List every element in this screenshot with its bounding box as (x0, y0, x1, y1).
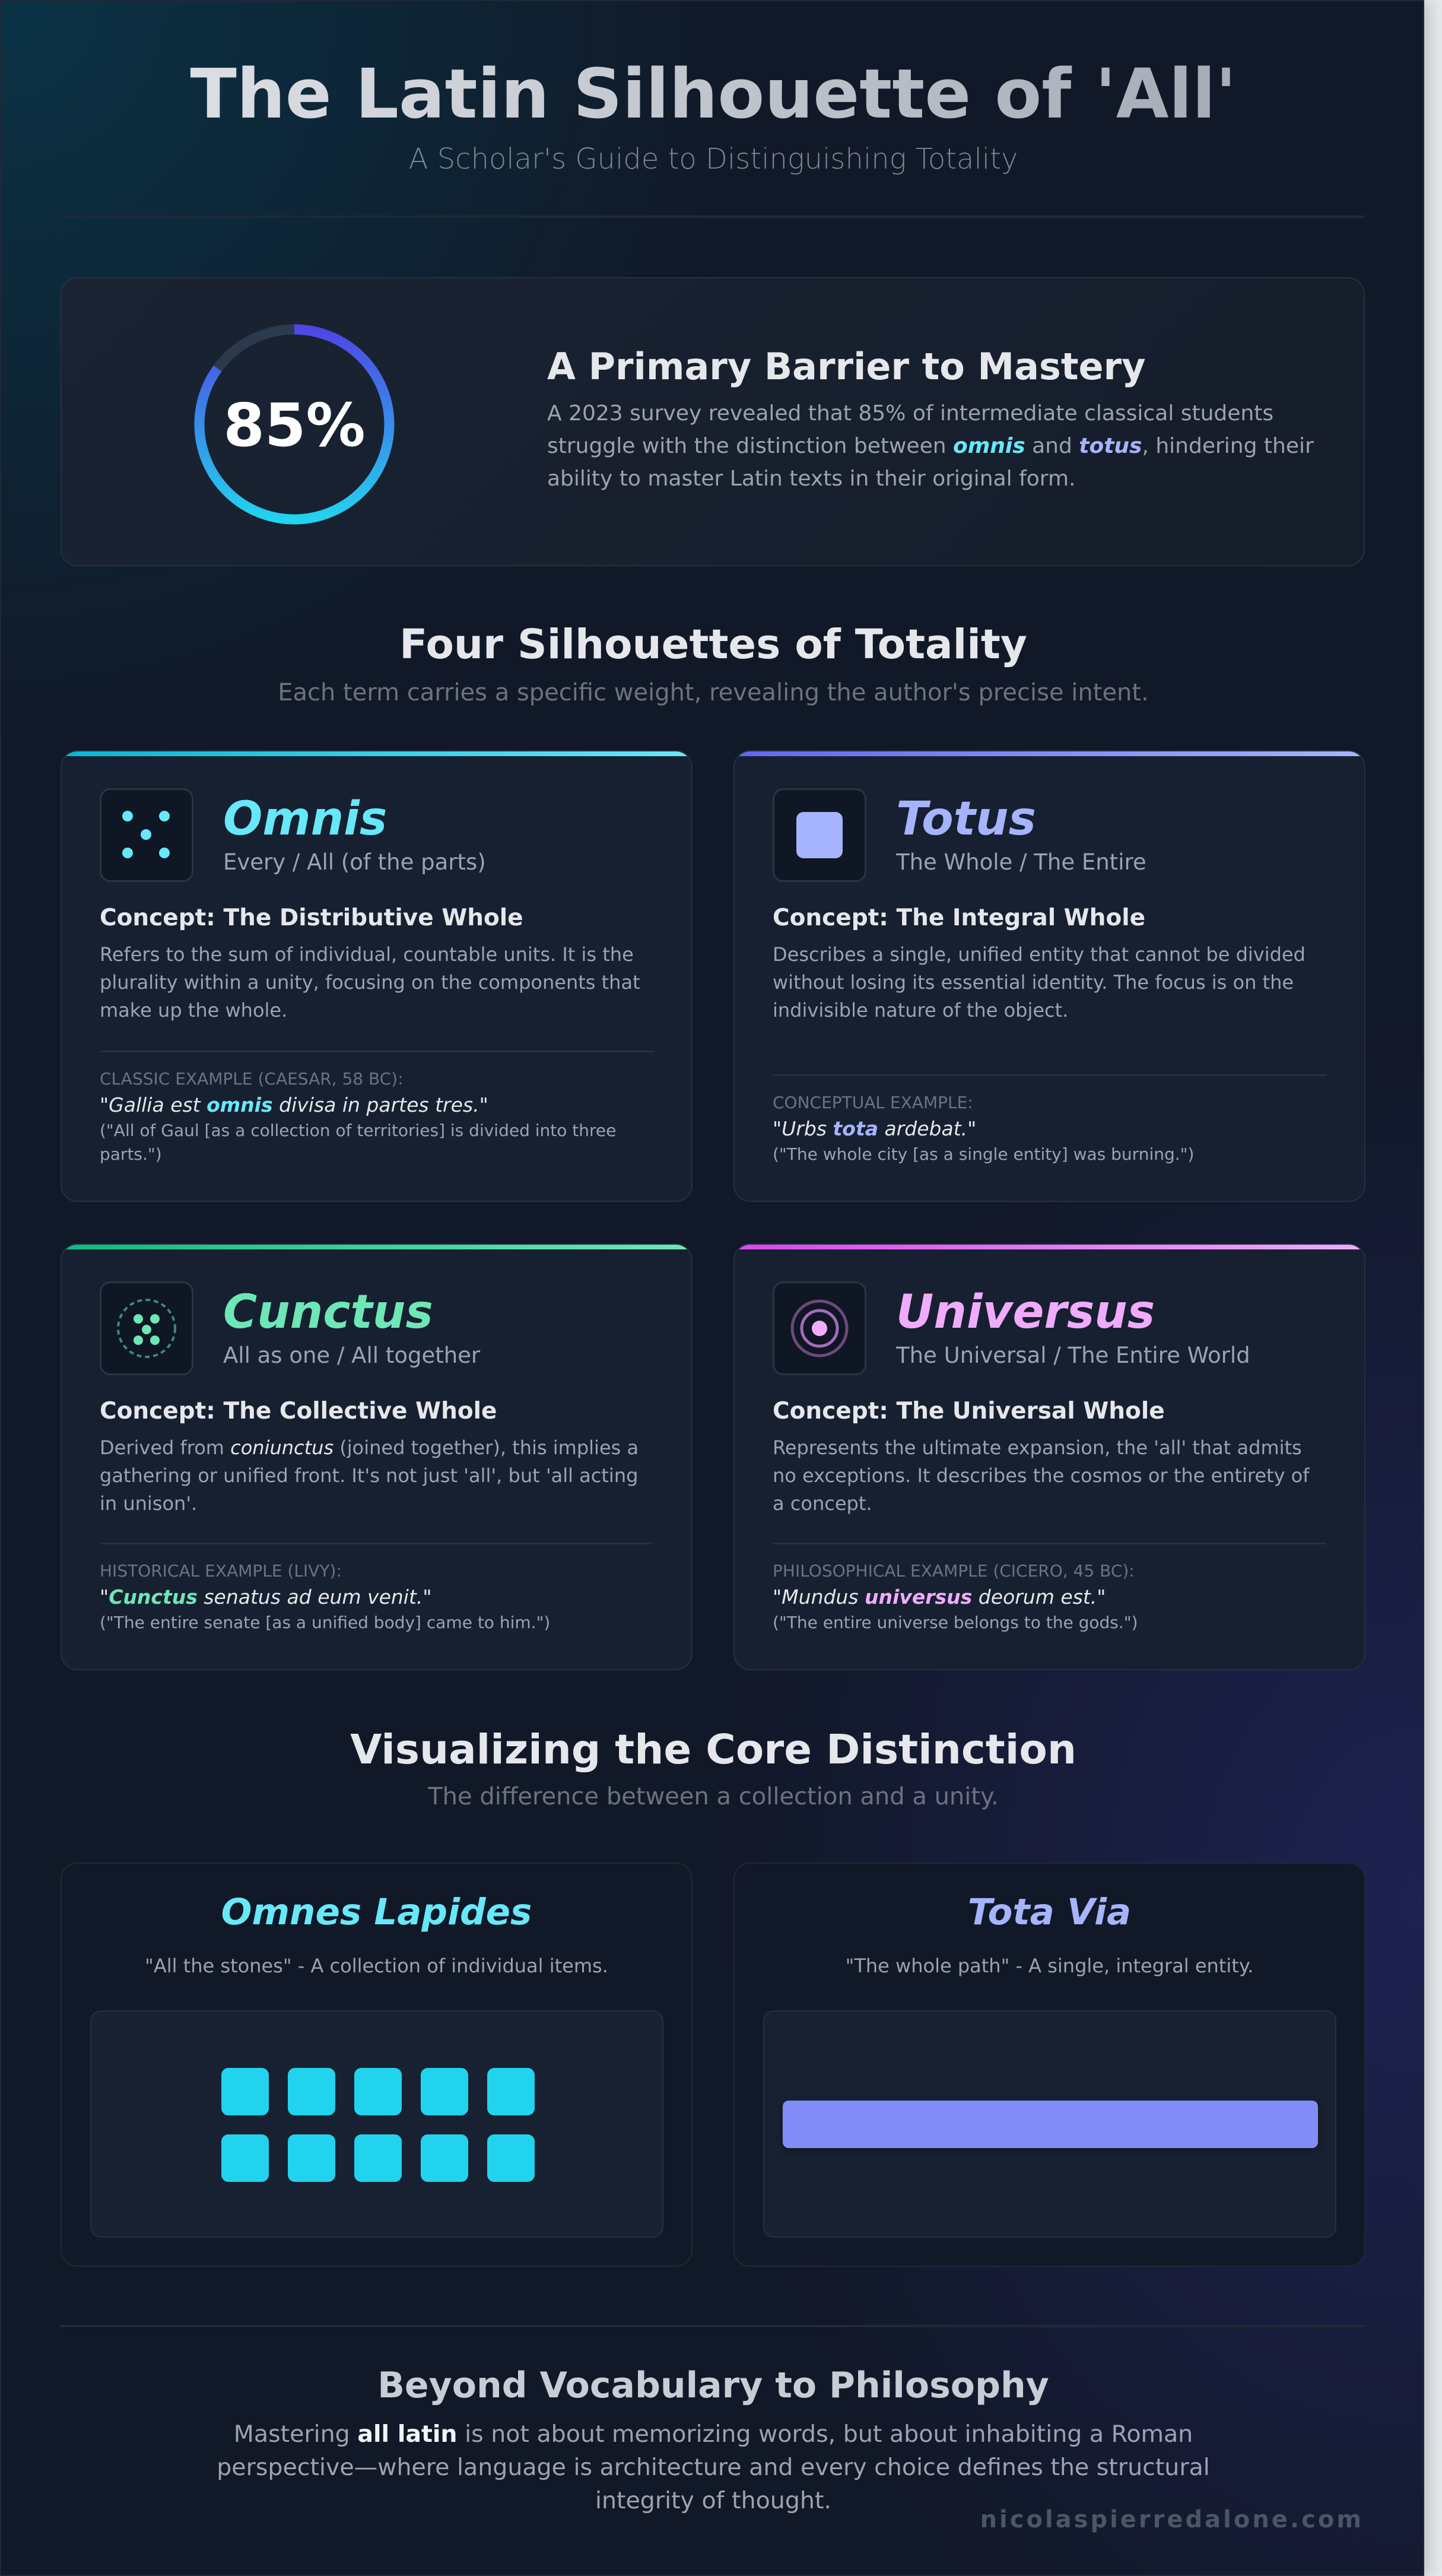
chart: stones grid (90, 2010, 663, 2238)
card header: cunctus (100, 1281, 481, 1375)
icon: solid square (773, 788, 866, 882)
card header: universus: Universus (896, 1286, 1155, 1339)
card header: totus (773, 788, 1146, 882)
panel: tota via: Tota Via (968, 1891, 1131, 1933)
chart: single path bar (763, 2010, 1336, 2238)
example: cunctus: "Cunctus senatus ad eum venit." (100, 1585, 432, 1609)
example: universus: PHILOSOPHICAL EXAMPLE (CICERO, 45 BC): (773, 1561, 1135, 1581)
example: universus (773, 1543, 1326, 1635)
example: omnis: CLASSIC EXAMPLE (CAESAR, 58 BC): (100, 1069, 404, 1089)
panel: omnis (61, 750, 693, 1202)
example: cunctus (100, 1543, 653, 1635)
panel: cunctus: Derived from coniunctus (joined together), this implies a gathering or unified front. It's not just 'all', but 'all acting in unison'. (100, 1436, 639, 1515)
chart: 85% ring: 85% (223, 391, 366, 460)
heading: visualizing: Visualizing the Core Distinction (350, 1726, 1076, 1774)
example: cunctus: HISTORICAL EXAMPLE (LIVY): (100, 1561, 342, 1581)
card header: omnis: Every / All (of the parts) (223, 849, 486, 875)
title: The Latin Silhouette of 'All' (190, 55, 1237, 134)
example: universus: ("The entire universe belongs to the gods.") (773, 1613, 1138, 1632)
example: cunctus: ("The entire senate [as a unified body] came to him.") (100, 1613, 550, 1632)
card header: totus: The Whole / The Entire (896, 849, 1146, 875)
panel: cunctus (61, 1243, 693, 1670)
card header: totus: Totus (896, 792, 1036, 845)
icon: scattered dots (100, 788, 193, 882)
subtitle: A Scholar's Guide to Distinguishing Totality (409, 142, 1018, 176)
panel: cunctus: Concept: The Collective Whole (100, 1398, 497, 1425)
card header: omnis (100, 788, 486, 882)
subheading: The difference between a collection and a unity. (428, 1783, 999, 1810)
panel: omnis: Refers to the sum of individual, countable units. It is the plurality within a unity, focusing on the components that make up the whole. (100, 943, 640, 1021)
panel: universus: Concept: The Universal Whole (773, 1398, 1165, 1425)
card header: cunctus: Cunctus (223, 1286, 433, 1339)
heading: stat: A Primary Barrier to Mastery (547, 345, 1145, 388)
panel: totus (733, 750, 1365, 1202)
panel: tota via (733, 1863, 1365, 2267)
panel: totus: Concept: The Integral Whole (773, 905, 1145, 931)
panel: omnes lapides (61, 1863, 693, 2267)
card header: universus (773, 1281, 1250, 1375)
card header: cunctus: All as one / All together (223, 1343, 480, 1368)
panel: omnes lapides: Omnes Lapides (221, 1891, 532, 1933)
text: conclusion: Mastering all latin is not about memorizing words, but about inhabiting a Roman perspective—where language is architecture and every choice defines the structural integrity of thought. (217, 2420, 1210, 2514)
panel: universus: Represents the ultimate expansion, the 'all' that admits no exceptions. It describes the cosmos or the entirety of a concept. (773, 1436, 1310, 1515)
text: stat description: A 2023 survey revealed that 85% of intermediate classical students struggle with the distinction between omnis and totus, hindering their ability to master Latin texts in their original form. (547, 401, 1314, 491)
example: omnis: "Gallia est omnis divisa in partes tres." (100, 1093, 488, 1116)
panel: statistic (61, 277, 1365, 566)
panel: universus (733, 1243, 1365, 1670)
panel: totus: Describes a single, unified entity that cannot be divided without losing its essential identity. The focus is on the indivisible nature of the object. (773, 943, 1306, 1021)
panel: omnis: Concept: The Distributive Whole (100, 905, 523, 931)
example: totus (773, 1074, 1326, 1166)
icon: grouped dots (100, 1281, 193, 1375)
heading: four silhouettes: Four Silhouettes of Totality (399, 621, 1027, 668)
example: totus: "Urbs tota ardebat." (773, 1117, 976, 1140)
example: totus: CONCEPTUAL EXAMPLE: (773, 1093, 973, 1112)
subheading: Each term carries a specific weight, revealing the author's precise intent. (278, 679, 1149, 706)
example: omnis: ("All of Gaul [as a collection of territories] is divided into three parts.") (100, 1121, 616, 1164)
card header: omnis: Omnis (223, 792, 387, 845)
panel: tota via: "The whole path" - A single, integral entity. (846, 1955, 1253, 1977)
footer: domain: nicolaspierredalone.com (980, 2506, 1364, 2533)
heading: conclusion: Beyond Vocabulary to Philosophy (377, 2365, 1049, 2406)
example: universus: "Mundus universus deorum est." (773, 1585, 1106, 1609)
card header: universus: The Universal / The Entire World (896, 1343, 1250, 1368)
example: totus: ("The whole city [as a single entity] was burning.") (773, 1144, 1194, 1164)
icon: concentric circles (773, 1281, 866, 1375)
chart: 85% ring (195, 324, 394, 525)
example: omnis (100, 1051, 653, 1166)
panel: omnes lapides: "All the stones" - A collection of individual items. (145, 1955, 608, 1977)
